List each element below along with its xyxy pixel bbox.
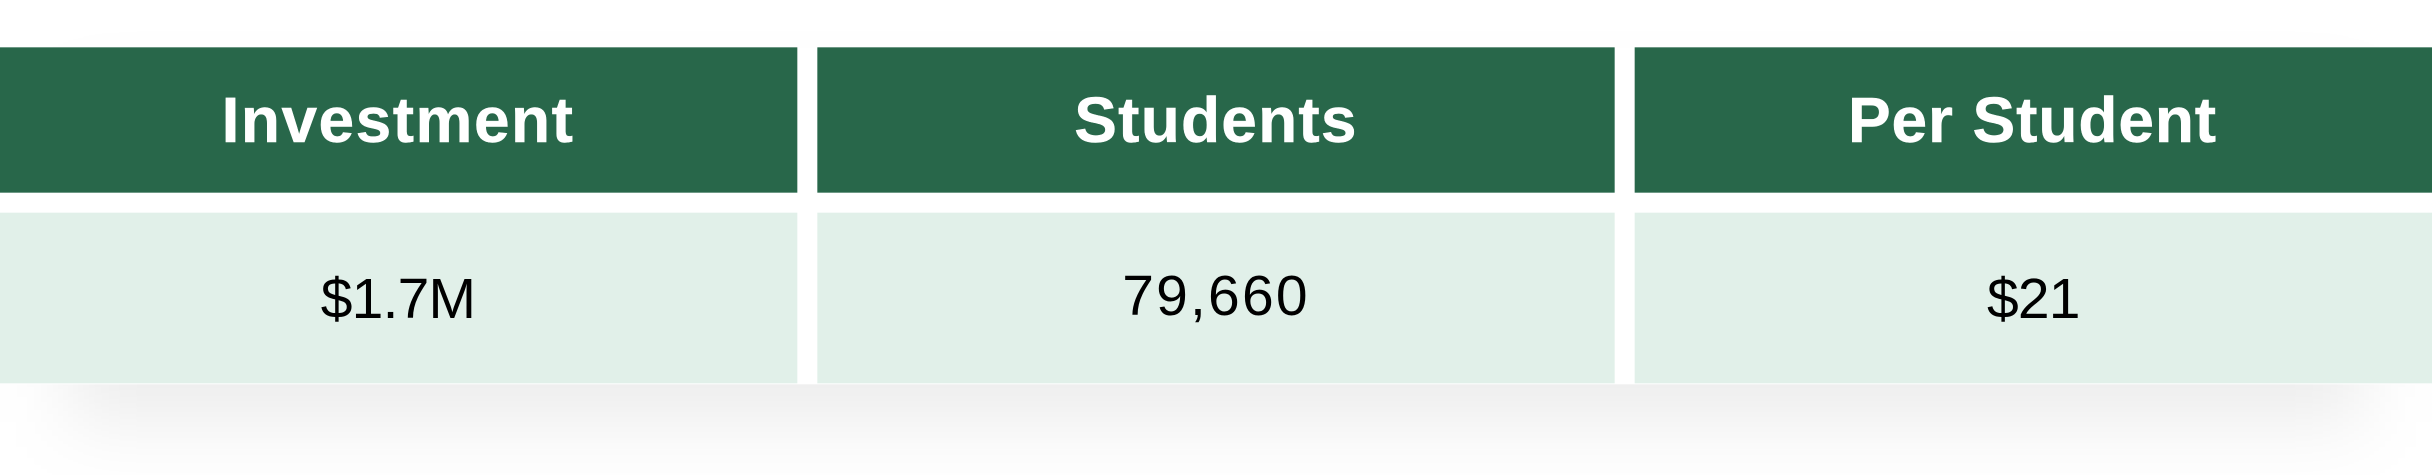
header cell: Investment: Investment	[222, 84, 574, 156]
value cell: $1.7M	[0, 213, 797, 383]
value cell: $21: $21	[1987, 267, 2080, 331]
column: Students	[817, 47, 1615, 383]
header cell: Students	[817, 47, 1615, 193]
header cell: Investment	[0, 47, 797, 193]
column: Per Student	[1635, 47, 2432, 383]
table drop shadow	[68, 100, 2364, 422]
value cell: $1.7M: $1.7M	[321, 267, 475, 331]
header cell: Per Student	[1635, 47, 2432, 193]
value cell: 79,660	[817, 213, 1615, 383]
header cell: Per Student: Per Student	[1848, 84, 2217, 156]
value cell: $21	[1635, 213, 2432, 383]
column: Investment	[0, 47, 797, 383]
value cell: 79,660: 79,660	[1122, 264, 1310, 328]
header cell: Students: Students	[1074, 84, 1358, 156]
